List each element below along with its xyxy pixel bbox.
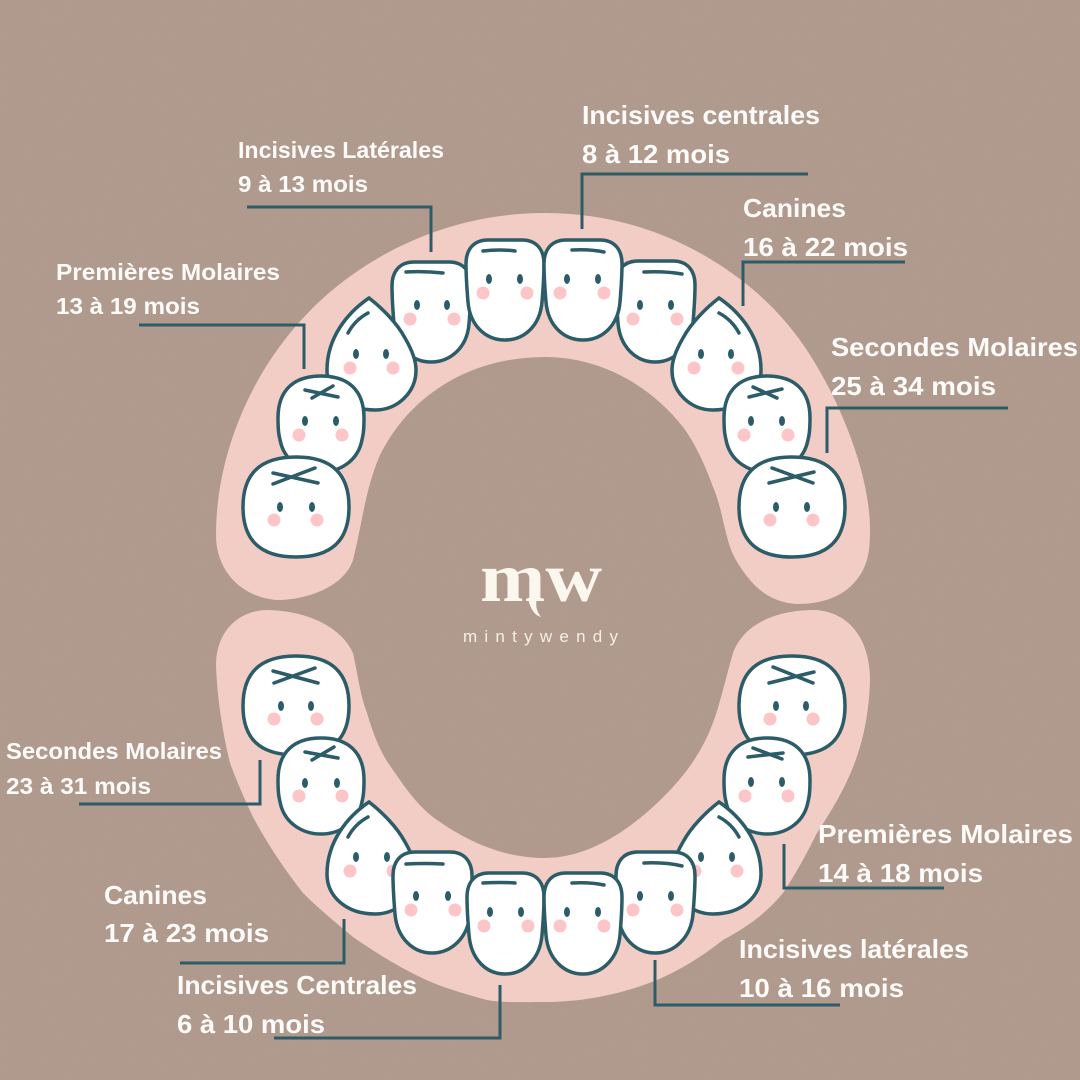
- tooth: lower left central incisor: [467, 873, 544, 974]
- label: Canines upper: 16 à 22 mois: [743, 232, 908, 262]
- lower gum: [216, 610, 870, 1002]
- tooth: upper right central incisor: [544, 240, 622, 340]
- label: Premières Molaires upper: 13 à 19 mois: [56, 293, 200, 319]
- tooth: upper right canine: [672, 298, 761, 410]
- label: Incisives Centrales lower: [177, 970, 500, 1039]
- tooth: upper left central incisor: [466, 240, 544, 340]
- label: Secondes Molaires lower: 23 à 31 mois: [6, 773, 151, 799]
- label: Secondes Molaires upper: [827, 332, 1078, 453]
- label: Canines lower: Canines: [104, 880, 207, 910]
- tooth: upper left second molar: [243, 457, 349, 557]
- tooth: upper right first molar: [724, 376, 810, 472]
- upper gum: [216, 213, 870, 604]
- label: Incisives Latérales upper: 9 à 13 mois: [238, 171, 368, 197]
- label: Secondes Molaires upper: Secondes Molaires: [831, 332, 1078, 362]
- label: Incisives latérales lower: 10 à 16 mois: [739, 973, 904, 1003]
- label: Canines upper: Canines: [743, 193, 846, 223]
- label: Premières Molaires lower: Premières Molaires: [818, 819, 1073, 849]
- label: Incisives Centrales lower: 6 à 10 mois: [177, 1009, 325, 1039]
- label: Incisives centrales upper: Incisives centrales: [582, 100, 820, 130]
- label: Incisives Latérales upper: Incisives Latérales: [238, 137, 444, 163]
- label: Premières Molaires upper: Premières Molaires: [56, 259, 280, 285]
- tooth: upper right lateral incisor: [616, 261, 695, 362]
- label: Premières Molaires lower: 14 à 18 mois: [818, 858, 983, 888]
- upper teeth: [243, 240, 845, 557]
- tooth: upper left canine: [327, 298, 416, 410]
- label: Canines lower: 17 à 23 mois: [104, 918, 269, 948]
- label: Incisives centrales upper: [582, 100, 820, 229]
- tooth: lower right lateral incisor: [616, 852, 695, 953]
- logo wordmark: mintywendy: [463, 627, 618, 646]
- tooth: lower right central incisor: [544, 873, 622, 974]
- tooth: lower left first molar: [278, 738, 364, 834]
- label: Secondes Molaires lower: [6, 738, 260, 804]
- tooth: lower right first molar: [724, 738, 810, 834]
- label: Incisives Centrales lower: Incisives Centrales: [177, 970, 417, 1000]
- lower teeth: [243, 656, 845, 974]
- tooth: lower left canine: [327, 802, 416, 914]
- tooth: lower right canine: [672, 802, 761, 914]
- label: Secondes Molaires upper: 25 à 34 mois: [831, 371, 996, 401]
- label: Secondes Molaires lower: Secondes Molaires: [6, 738, 222, 764]
- tooth: upper right second molar: [739, 457, 845, 557]
- label: Incisives Latérales upper: [238, 137, 444, 252]
- logo: [463, 540, 618, 646]
- logo monogram: mw: [480, 540, 602, 617]
- tooth: lower left lateral incisor: [393, 852, 472, 953]
- label: Incisives latérales lower: [655, 934, 969, 1005]
- label: Incisives latérales lower: Incisives latérales: [739, 934, 969, 964]
- label: Canines lower: [104, 880, 344, 963]
- logo tail: [528, 598, 541, 617]
- label: Premières Molaires lower: [784, 819, 1073, 888]
- tooth: lower left second molar: [243, 656, 349, 755]
- label: Incisives centrales upper: 8 à 12 mois: [582, 139, 730, 169]
- tooth: lower right second molar: [739, 656, 845, 755]
- label: Premières Molaires upper: [56, 259, 304, 369]
- tooth: upper left lateral incisor: [392, 262, 471, 362]
- label: Canines upper: [743, 193, 908, 306]
- tooth: upper left first molar: [278, 376, 364, 472]
